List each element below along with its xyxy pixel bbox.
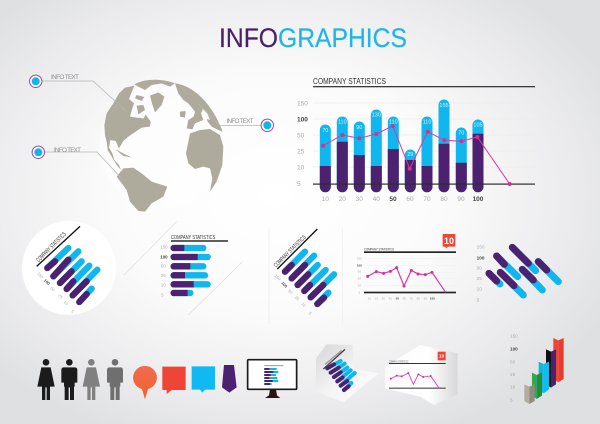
y axis labels: 150 — [297, 100, 308, 108]
chart: 3D bars: 50 — [510, 359, 516, 364]
panel: line chart with badge: 60 — [403, 297, 406, 301]
panel: line chart with badge: 50 — [358, 270, 361, 274]
callout: right info text — [197, 103, 273, 132]
panel: line chart with badge — [357, 234, 456, 301]
chart: 3D bars: 25 — [510, 372, 516, 377]
panel: horizontal bar chart: 150 — [160, 244, 168, 249]
panel: line chart with badge: 10 — [368, 297, 371, 301]
y axis labels: 50 — [297, 132, 305, 140]
bar value labels: 155 — [439, 103, 449, 109]
panel: line chart with badge: 20 — [375, 297, 378, 301]
panel: diagonal bar chart — [269, 228, 342, 325]
y axis labels: 25 — [297, 148, 305, 156]
x axis labels: 40 — [373, 196, 380, 203]
panel: diagonal bar chart: 5 — [308, 310, 313, 316]
panel: line chart with badge: 100 — [357, 263, 362, 267]
panel: line chart with badge: COMPANY STATISTICS — [364, 247, 395, 251]
panel: diagonal chart in white circle: 10 — [63, 300, 70, 307]
bar value labels: 90 — [356, 125, 362, 131]
panel: diagonal chart in white circle: COMPANY STATISTICS — [35, 231, 68, 264]
panel: horizontal bar chart: 25 — [161, 273, 166, 278]
x axis labels: 20 — [339, 196, 346, 203]
x axis labels: 70 — [423, 196, 431, 203]
x axis labels: 50 — [389, 196, 397, 203]
icon: red speech bubble — [162, 367, 186, 394]
panel: diagonal chart in white circle: 25 — [57, 293, 64, 300]
trend line — [321, 124, 512, 186]
bar value labels: 110 — [423, 120, 431, 126]
panel: diagonal bar chart: 10 — [300, 301, 308, 308]
panel: floating diagonal bars: 25 — [477, 276, 482, 281]
chart: 3D bars: 10 — [510, 385, 516, 390]
panel: line chart with badge: 70 — [410, 297, 413, 301]
x axis labels: 60 — [406, 196, 414, 203]
chart: 3D bars: 5 — [510, 398, 513, 403]
bar value labels: 70 — [458, 130, 464, 136]
cyan bars — [325, 105, 478, 186]
panel: horizontal bar chart: 50 — [161, 264, 166, 269]
icon: man grey — [107, 359, 123, 400]
x axis labels — [322, 196, 484, 203]
title: INFOGRAPHICS — [219, 23, 407, 53]
purple bars — [320, 134, 484, 192]
icon: man black — [61, 359, 77, 400]
panel: line chart with badge: 90 — [424, 297, 427, 301]
callout: lower left info text — [32, 146, 123, 180]
panel: diagonal chart in white circle: 150 — [36, 271, 45, 280]
callout: lower left info text: INFO TEXT — [54, 147, 81, 154]
bar value labels: 105 — [473, 122, 483, 128]
icon: woman black — [37, 359, 55, 400]
panel: floating diagonal bars: 50 — [477, 266, 482, 271]
panel: line chart with badge: 80 — [417, 297, 420, 301]
panel: line chart with badge: 10 — [358, 283, 361, 287]
panel: line chart with badge: 30 — [382, 297, 385, 301]
icon: woman grey — [83, 359, 100, 400]
icons: people — [37, 359, 297, 400]
panel: floating diagonal bars: 5 — [477, 297, 480, 302]
bar value labels — [322, 103, 483, 158]
y axis labels: 100 — [297, 116, 308, 124]
panel: floating diagonal bars: 150 — [477, 245, 485, 250]
chart heading: COMPANY STATISTICS — [313, 77, 386, 86]
panel: diagonal bar chart: 100 — [280, 280, 289, 289]
panel: line chart with badge: 50 — [396, 297, 399, 301]
panel: floating diagonal bars: 10 — [477, 287, 482, 292]
callout: right info text: INFO TEXT — [226, 118, 254, 125]
panel: perspective bar chart — [316, 344, 378, 402]
chart: 3D bars — [510, 334, 564, 404]
panel: diagonal chart in white circle: 100 — [43, 278, 52, 287]
icon: monitor — [248, 360, 297, 398]
panel: line chart with badge: 25 — [358, 277, 361, 281]
bar value labels: 29 — [407, 152, 413, 158]
panel: horizontal bar chart: 10 — [161, 283, 166, 288]
chart: 3D bars: 100 — [510, 347, 518, 352]
badge: small 10: 10 — [439, 354, 445, 359]
panel: diagonal bar chart: 150 — [274, 273, 282, 282]
x axis labels: 100 — [473, 196, 484, 203]
panel: diagonal bar chart: 25 — [294, 295, 301, 302]
bar value labels: 110 — [389, 120, 398, 126]
panel: diagonal bar chart: COMPANY STATISTICS — [273, 235, 308, 269]
callout: top left info text: INFO TEXT — [51, 74, 79, 81]
bar value labels: 70 — [322, 128, 328, 134]
bar value labels: 130 — [372, 112, 381, 118]
badge: 10: 10 — [444, 236, 454, 246]
panel: diagonal chart in white circle — [22, 221, 116, 315]
panel: horizontal bar chart: COMPANY STATISTICS — [171, 235, 216, 241]
axis line — [313, 184, 535, 185]
panel: diagonal bar chart: 50 — [287, 288, 294, 295]
icon: purple tag — [222, 365, 237, 393]
panel: horizontal bar chart: 5 — [161, 292, 164, 297]
globe — [100, 80, 225, 212]
panel: diagonal chart in white circle: 5 — [70, 309, 76, 314]
x axis labels: 80 — [440, 196, 448, 203]
panel: horizontal bar chart: 100 — [160, 254, 168, 259]
callout: top left info text — [30, 74, 127, 112]
x axis labels: 10 — [322, 196, 329, 203]
panel: floating diagonal bars: 100 — [477, 255, 485, 260]
x axis labels: 30 — [356, 196, 363, 203]
panel: horizontal bar chart — [124, 222, 243, 315]
bar value labels: 110 — [338, 120, 347, 126]
icon: map pin — [133, 366, 157, 399]
y axis labels: 5 — [297, 181, 301, 188]
panel: diagonal chart in white circle: 50 — [49, 286, 57, 293]
x axis labels: 90 — [457, 196, 465, 203]
panel: line chart with badge: 100 — [430, 297, 435, 301]
panel: line chart with badge: 150 — [357, 256, 362, 260]
panel: perspective line chart — [385, 345, 458, 405]
panel: line chart with badge: 5 — [358, 290, 360, 294]
bar chart: company statistics — [297, 77, 536, 203]
panel: floating diagonal bars — [477, 245, 558, 302]
panel: perspective line chart: COMPANY STATISTICS — [389, 360, 408, 364]
y axis labels — [297, 100, 308, 188]
panel: line chart with badge: 40 — [389, 297, 392, 301]
chart: 3D bars: 150 — [510, 334, 518, 339]
icon: cyan speech bubble — [192, 366, 215, 393]
y axis labels: 10 — [297, 164, 305, 172]
